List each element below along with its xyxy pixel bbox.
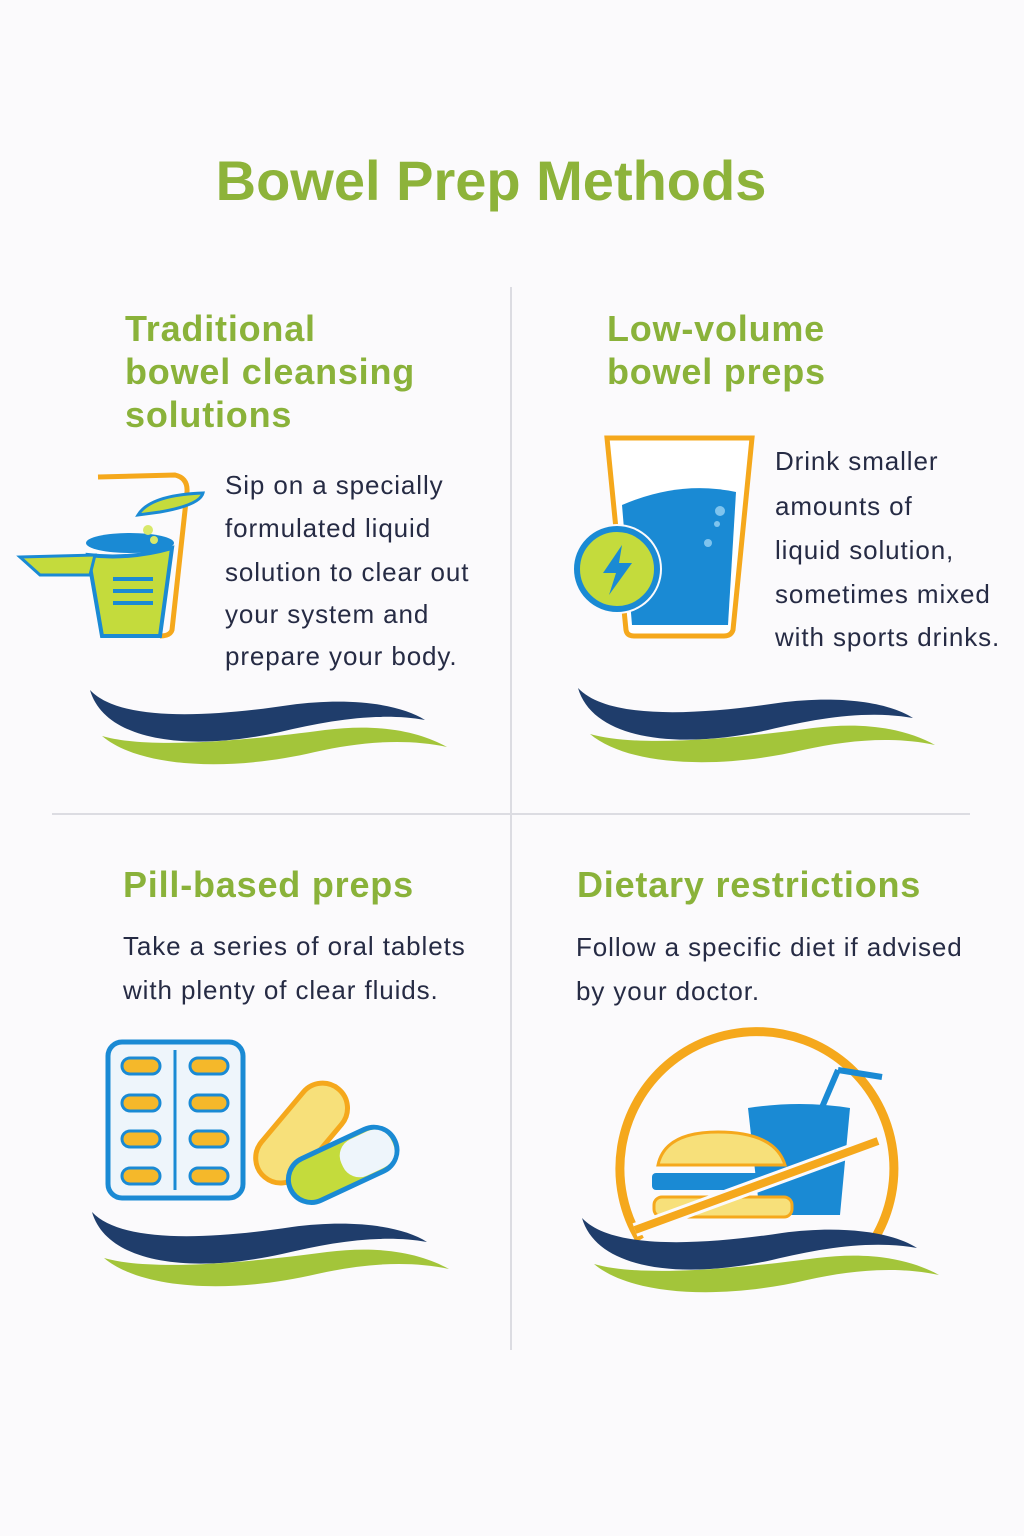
text: traditional: your system and [225,599,429,629]
text: dietary: by your doctor. [576,976,760,1006]
panel: low-volume [572,308,1000,762]
text: traditional: formulated liquid [225,513,431,543]
wave [92,1212,449,1286]
icon: pills [108,1042,405,1210]
text: traditional: Sip on a specially [225,470,444,500]
text: low-volume: sometimes mixed [775,579,991,609]
wave [582,1218,939,1292]
heading: traditional: Traditional [125,308,316,349]
wave [90,690,447,764]
text: traditional: prepare your body. [225,641,458,671]
heading: traditional: bowel cleansing [125,351,415,392]
heading: low-volume: Low-volume [607,308,825,349]
heading: dietary: Dietary restrictions [577,864,921,905]
icon: measuring cup [20,475,203,636]
text: low-volume: with sports drinks. [774,622,1000,652]
heading: traditional: solutions [125,394,292,435]
icon: glass with bolt [572,438,752,636]
text: dietary: Follow a specific diet if advised [576,932,963,962]
panel: traditional [20,308,469,764]
heading: low-volume: bowel preps [607,351,826,392]
panel: pill-based [92,864,466,1286]
text: pill-based: with plenty of clear fluids. [122,975,439,1005]
text: low-volume: liquid solution, [775,535,954,565]
heading: pill-based: Pill-based preps [123,864,414,905]
wave [578,688,935,762]
text: pill-based: Take a series of oral tablets [123,931,466,961]
text: low-volume: Drink smaller [775,446,938,476]
title: Bowel Prep Methods [216,149,766,212]
icon: no fast food [620,1032,894,1240]
text: low-volume: amounts of [775,491,913,521]
panel: dietary [576,864,963,1292]
text: traditional: solution to clear out [225,557,469,587]
